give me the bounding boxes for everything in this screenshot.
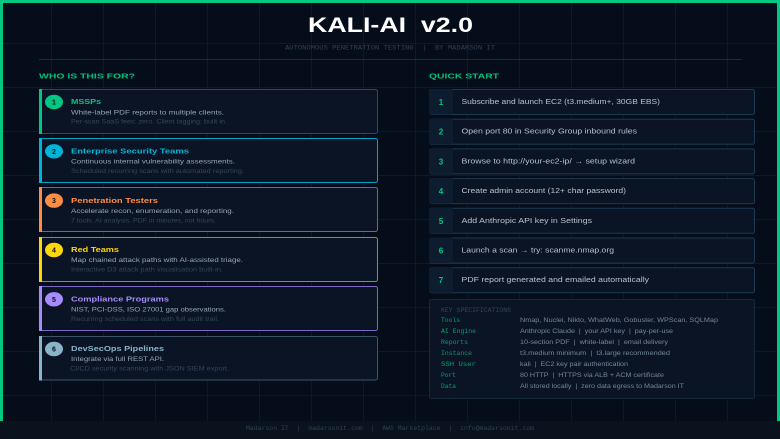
step 3	[429, 148, 754, 174]
card: MSSPs	[39, 89, 378, 134]
card: Red Teams	[39, 237, 378, 282]
spec: reports: Reports	[441, 339, 468, 346]
spec: instance: t3.medium minimum | t3.large recommended	[520, 350, 671, 357]
panel: quick start steps	[429, 89, 754, 293]
card: Compliance Programs: Recurring scheduled scans with full audit trail.	[71, 316, 219, 323]
spec: port: Port	[441, 372, 456, 379]
spec: AI engine	[441, 328, 674, 335]
spec: reports: 10-section PDF | white-label | email delivery	[520, 339, 669, 346]
card: Compliance Programs: Compliance Programs	[71, 294, 169, 304]
subtitle: AUTONOMOUS PENETRATION TESTING | BY MADARSON IT	[285, 44, 495, 52]
card: Penetration Testers: Accelerate recon, enumeration, and reporting.	[71, 208, 234, 215]
footer	[0, 421, 780, 439]
card: DevSecOps Pipelines: 6	[52, 346, 56, 354]
card: MSSPs: 1	[52, 100, 56, 106]
card: Penetration Testers	[39, 187, 378, 232]
spec: tools: Nmap, Nuclei, Nikto, WhatWeb, Gobuster, WPScan, SQLMap	[520, 317, 719, 324]
step 1	[429, 89, 754, 114]
card: Enterprise Security Teams: Enterprise Security Teams	[71, 146, 189, 156]
spec: AI engine: AI Engine	[441, 328, 476, 335]
spec: SSH user: kali | EC2 key pair authentication	[520, 361, 629, 368]
spec: reports	[441, 339, 669, 346]
step 6: Launch a scan → try: scanme.nmap.org	[462, 248, 614, 254]
step 7	[429, 267, 754, 293]
card: DevSecOps Pipelines: DevSecOps Pipelines	[71, 344, 164, 353]
spec: AI engine: Anthropic Claude | your API key | pay-per-use	[520, 328, 674, 335]
spec: instance	[441, 350, 671, 357]
spec: data: Data	[441, 383, 456, 390]
card: Compliance Programs: 5	[52, 297, 56, 304]
spec: port	[441, 372, 665, 379]
step 5: 5	[439, 217, 444, 226]
step 6	[429, 238, 754, 263]
spec: port: 80 HTTP | HTTPS via ALB + ACM certificate	[520, 372, 665, 379]
step 4	[429, 178, 754, 204]
card: Enterprise Security Teams: Continuous internal vulnerability assessments.	[71, 158, 235, 166]
step 3: 3	[439, 157, 444, 166]
step 5	[429, 208, 754, 233]
card: MSSPs: White-label PDF reports to multiple clients.	[71, 109, 224, 116]
card: Enterprise Security Teams: Scheduled recurring scans with automated reporting.	[71, 168, 244, 175]
title: KALI-AI v2.0	[308, 14, 473, 37]
card: Penetration Testers: 3	[52, 198, 56, 205]
card: Penetration Testers: 7 tools. AI analysis. PDF in minutes, not hours.	[71, 217, 216, 224]
footer: Madarson IT | madarsonit.com | AWS Marketplace | info@madarsonit.com	[246, 425, 534, 432]
step 2: Open port 80 in Security Group inbound rules	[462, 129, 638, 136]
step 1: 1	[439, 98, 444, 107]
step 4: 4	[439, 187, 444, 196]
spec: instance: Instance	[441, 350, 472, 357]
card: Red Teams: Red Teams	[71, 245, 119, 254]
spec: tools: Tools	[441, 317, 460, 324]
step 7: PDF report generated and emailed automatically	[462, 277, 650, 284]
step 2: 2	[439, 128, 444, 137]
step 6: 6	[439, 246, 444, 256]
card: Red Teams: Map chained attack paths with AI-assisted triage.	[71, 257, 243, 264]
card: Enterprise Security Teams	[39, 138, 378, 183]
step 7: 7	[439, 276, 444, 285]
step 1: Subscribe and launch EC2 (t3.medium+, 30GB EBS)	[462, 99, 660, 106]
card: MSSPs: MSSPs	[71, 97, 101, 106]
card: MSSPs: Per-scan SaaS fees: zero. Client tagging: built-in.	[71, 119, 227, 126]
step 3: Browse to http://your-ec2-ip/ → setup wizard	[462, 158, 635, 165]
card: Red Teams: Interactive D3 attack path visualisation built-in.	[71, 267, 223, 274]
panel: key specifications	[430, 300, 754, 398]
spec: SSH user	[441, 361, 629, 368]
step 5: Add Anthropic API key in Settings	[462, 218, 593, 225]
card: Compliance Programs	[39, 286, 378, 331]
spec: data	[441, 383, 684, 390]
card: Penetration Testers: Penetration Testers	[71, 196, 158, 205]
step 4: Create admin account (12+ char password)	[462, 188, 626, 195]
step 2	[429, 119, 754, 144]
heading: quick start: QUICK START	[429, 72, 499, 80]
spec: tools	[441, 317, 719, 324]
panel: audience cards	[39, 89, 378, 380]
card: Compliance Programs: NIST, PCI-DSS, ISO 27001 gap observations.	[71, 306, 226, 314]
card: Enterprise Security Teams: 2	[52, 149, 56, 156]
card: DevSecOps Pipelines	[39, 336, 378, 380]
spec: data: All stored locally | zero data egress to Madarson IT	[520, 383, 684, 390]
card: Red Teams: 4	[52, 248, 56, 254]
card: DevSecOps Pipelines: CI/CD security scanning with JSON SIEM export.	[70, 366, 229, 373]
heading: who is this for: WHO IS THIS FOR?	[39, 72, 135, 80]
spec: SSH user: SSH User	[441, 361, 476, 368]
specs heading: KEY SPECIFICATIONS	[441, 307, 511, 314]
card: DevSecOps Pipelines: Integrate via full REST API.	[71, 356, 164, 363]
